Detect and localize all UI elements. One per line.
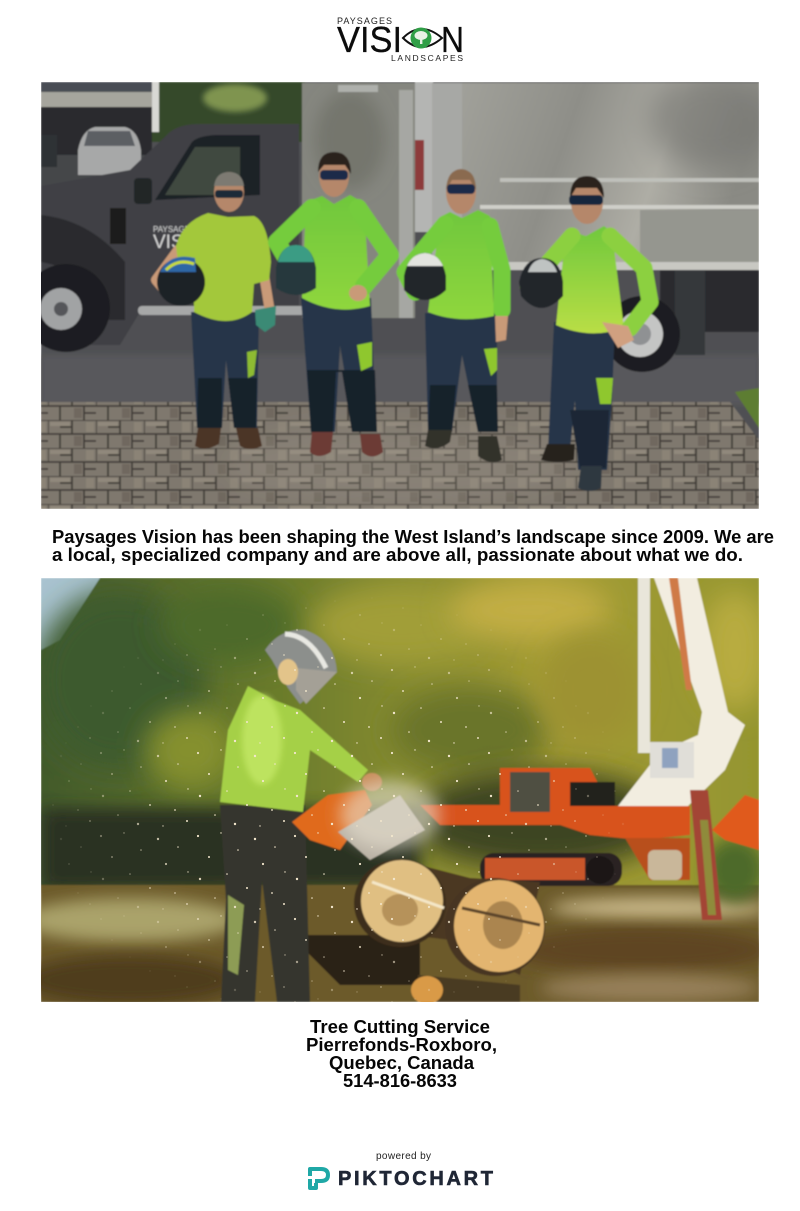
glove (255, 306, 276, 332)
Piktochart wordmark: PIKTOCHART (338, 1168, 493, 1190)
head and glasses (570, 187, 604, 224)
jacket (220, 686, 368, 812)
hand (349, 285, 367, 301)
sawdust spray glow (340, 780, 440, 850)
phone number: 514-816-8633 (343, 1070, 457, 1091)
shirt (556, 226, 624, 333)
paved driveway (41, 388, 759, 509)
pickup truck cab (41, 124, 308, 345)
intro line 1: Paysages Vision has been shaping the West Island’s landscape since 2009. We are (52, 526, 774, 547)
intro line 2: a local, specialized company and are above all, passionate about what we do. (52, 544, 743, 565)
hand (602, 322, 634, 348)
boots (425, 430, 452, 448)
shirt (176, 213, 271, 321)
logo text: VISI: VISI (337, 19, 402, 60)
hand (362, 773, 382, 791)
head and glasses (213, 185, 246, 213)
logo: Paysages Vision Landscapes (337, 16, 464, 63)
contact details (306, 1016, 497, 1091)
sleeves (528, 236, 650, 328)
icon: eye with tree (403, 28, 442, 48)
pickup truck cab: PAYSAGES (153, 225, 195, 234)
head and glasses (318, 164, 350, 198)
legs (191, 312, 259, 428)
intro paragraph (52, 526, 774, 565)
photo background: house, trees and road (41, 82, 759, 440)
service name: Tree Cutting Service (310, 1016, 490, 1037)
boots (310, 432, 333, 456)
chainsaw (292, 790, 372, 850)
powered by Piktochart footer (310, 1151, 493, 1190)
truck wheels (22, 264, 680, 372)
logo text: N: N (441, 19, 464, 60)
icon: Piktochart mark (310, 1169, 328, 1188)
arm (495, 316, 508, 342)
legs (548, 322, 615, 470)
utility box: small truck (302, 83, 415, 318)
location line 1: Pierrefonds-Roxboro, (306, 1034, 497, 1055)
person 2 (276, 152, 390, 456)
leaf-covered ground (20, 838, 770, 1006)
helmet (404, 253, 446, 300)
boots (195, 428, 221, 449)
logo text: Landscapes: LANDSCAPES (391, 53, 463, 63)
forearms (156, 250, 270, 312)
shirt (428, 210, 494, 319)
utility box: large truck (432, 70, 770, 355)
flying sawdust (41, 578, 759, 1002)
person 4 (519, 176, 650, 491)
shirt (302, 195, 370, 310)
helmet (519, 258, 563, 308)
dark hedge (41, 808, 420, 890)
log pile (290, 859, 545, 1004)
location line 2: Quebec, Canada (329, 1052, 475, 1073)
pickup truck cab: VIS (153, 232, 184, 253)
logo text: Paysages: PAYSAGES (337, 16, 392, 26)
silver car (41, 127, 141, 175)
helmet and visor (265, 630, 337, 704)
photo: crew of four in front of trucks (22, 70, 770, 509)
sleeves (277, 208, 390, 286)
legs (425, 313, 497, 432)
photo background: sunlit trees (35, 578, 770, 1002)
white aerial lift boom (618, 578, 745, 806)
person 3 (404, 169, 508, 462)
powered by label: powered by (376, 1151, 431, 1162)
orange tracked lift machine (420, 768, 759, 920)
head and glasses (446, 179, 476, 214)
person 1 (156, 172, 276, 449)
worker with helmet and chainsaw (220, 630, 425, 1002)
legs (301, 298, 376, 432)
boots (541, 444, 575, 462)
helmet (276, 245, 316, 295)
trousers (220, 805, 310, 1002)
photo: arborist cutting logs with chainsaw (20, 578, 770, 1006)
sleeves (405, 224, 502, 310)
helmet (157, 258, 205, 306)
